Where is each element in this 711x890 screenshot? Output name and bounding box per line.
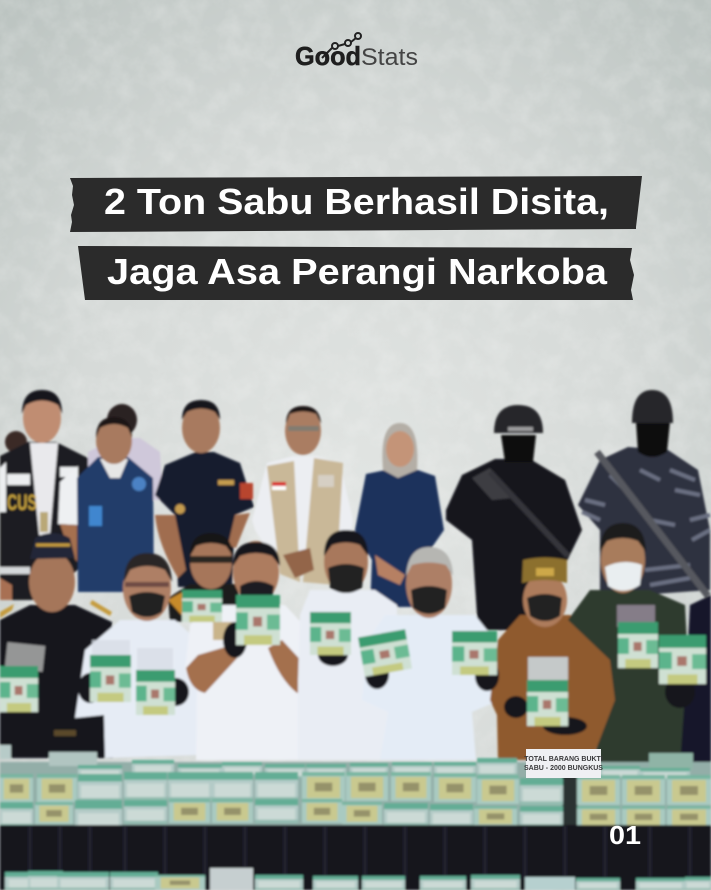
person: customs officer in cap, front left	[0, 533, 113, 758]
person: beige vest official	[252, 406, 353, 585]
person: glasses man behind the front row	[168, 533, 246, 622]
vest lettering: CUS	[7, 490, 37, 515]
held evidence packets	[0, 590, 706, 726]
person: customs officer in black vest	[0, 390, 88, 600]
person: white shirt man with black mask	[75, 553, 197, 758]
page number: 01	[609, 820, 641, 850]
person: center man in white safari shirt	[185, 541, 308, 760]
black table cloth	[0, 825, 711, 890]
person: blue puffer vest	[58, 417, 154, 592]
seized packages stacked on the table	[0, 745, 711, 833]
bottom row of packages	[0, 802, 33, 827]
person: far-left background head	[5, 431, 27, 453]
rifle	[490, 472, 568, 556]
placard line 2: SABU - 2000 BUNGKUS	[524, 765, 603, 772]
logo line chart icon	[322, 33, 361, 58]
title banner line 2	[78, 246, 634, 300]
packages below the table	[5, 868, 711, 890]
photo: officials and seized evidence	[0, 390, 711, 890]
person: white shirt man behind right	[298, 530, 397, 760]
person: army officer with white mask	[568, 523, 690, 765]
rifle	[597, 452, 708, 596]
person: lilac shirt behind	[88, 404, 163, 500]
evidence placard	[524, 749, 603, 778]
person: grey-haired man with black mask	[362, 547, 500, 760]
title text line 1: 2 Ton Sabu Berhasil Disita,	[104, 181, 609, 222]
person: dark uniform far right	[680, 595, 711, 765]
person: official in brown uniform	[490, 558, 622, 760]
logo wordmark second part: Stats	[361, 44, 418, 71]
middle row of packages	[0, 774, 33, 802]
person: dark uniform officer	[155, 400, 254, 587]
logo: GoodStats	[295, 33, 418, 71]
person: navy camo soldier with rifle	[578, 390, 710, 596]
gloved hands holding packets	[3, 622, 695, 735]
person: woman in hijab and navy shirt	[355, 423, 444, 607]
person: tactical soldier with helmet and rifle	[446, 405, 582, 630]
logo wordmark: Good	[295, 41, 361, 71]
title text line 2: Jaga Asa Perangi Narkoba	[107, 251, 608, 292]
title banner line 1	[70, 176, 642, 232]
placard line 1: TOTAL BARANG BUKTI	[524, 756, 603, 763]
